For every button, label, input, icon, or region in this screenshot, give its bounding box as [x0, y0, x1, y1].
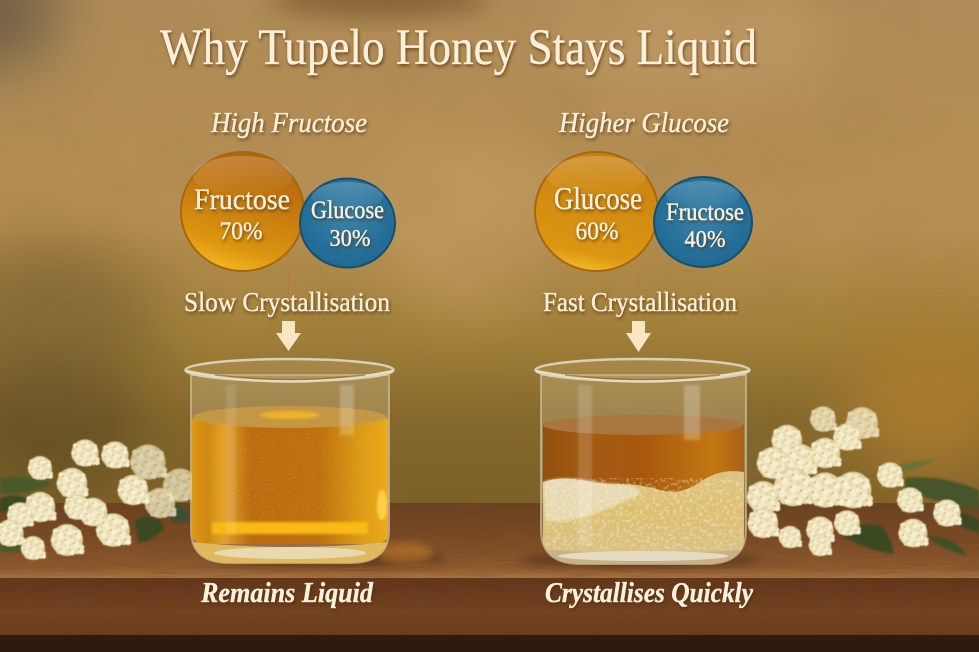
- glass rim: [186, 359, 394, 381]
- label: fast crystallisation: Fast Crystallisation: [543, 287, 737, 317]
- left blossoms: [0, 439, 198, 560]
- circle: glucose 60%: [535, 152, 658, 271]
- circle: fructose 40%: Fructose: [666, 199, 744, 226]
- circle: fructose 70%: [181, 152, 304, 271]
- heading: high fructose: High Fructose: [210, 108, 367, 139]
- crystal layer: [543, 471, 744, 552]
- honey surface: [193, 406, 387, 428]
- right column: higher glucose: [535, 108, 752, 352]
- thick glass base: [192, 542, 388, 563]
- honey liquid: [192, 418, 388, 544]
- jar: liquid honey: [186, 359, 394, 563]
- glass rim: [536, 359, 750, 381]
- right leaves: [840, 459, 979, 556]
- right blossoms: [747, 406, 962, 556]
- arrow down: [626, 321, 651, 352]
- heading: higher glucose: Higher Glucose: [558, 108, 729, 139]
- circle: glucose 30%: 30%: [330, 226, 370, 252]
- glass reflections: [578, 385, 592, 545]
- honey liquid: [543, 424, 744, 492]
- left leaves: [0, 477, 190, 552]
- connector line: [638, 272, 640, 318]
- flowers: right sprig: [747, 406, 979, 556]
- thick glass base: [545, 550, 742, 564]
- circle: glucose 30%: [300, 178, 395, 268]
- glass body: [541, 375, 746, 564]
- bright glow: [212, 522, 368, 534]
- circle: fructose 40%: 40%: [684, 227, 726, 253]
- caption: crystallises quickly: Crystallises Quickly: [545, 577, 753, 609]
- wooden table: [0, 503, 979, 652]
- glass reflections: [226, 385, 236, 535]
- jar: crystallised honey: [536, 359, 750, 564]
- connector line: [288, 272, 290, 318]
- circle: fructose 70%: Fructose: [194, 183, 290, 216]
- background: warm textured wall: [0, 0, 979, 510]
- label: slow crystallisation: Slow Crystallisation: [184, 287, 390, 317]
- circle: glucose 30%: Glucose: [311, 197, 384, 224]
- circle: fructose 70%: 70%: [220, 218, 262, 245]
- caption: remains liquid: Remains Liquid: [200, 577, 373, 609]
- left column: high fructose: [181, 108, 395, 351]
- arrow down: [276, 321, 301, 351]
- title: Why Tupelo Honey Stays Liquid: [160, 20, 757, 76]
- flowers: left sprig: [0, 439, 198, 560]
- circle: glucose 60%: 60%: [576, 218, 618, 245]
- circle: fructose 40%: [654, 177, 752, 267]
- white crystal specks: [543, 478, 640, 522]
- glass body: [191, 375, 389, 563]
- honey surface: [543, 415, 743, 435]
- circle: glucose 60%: Glucose: [554, 180, 642, 216]
- suspended sparkles: [205, 432, 375, 522]
